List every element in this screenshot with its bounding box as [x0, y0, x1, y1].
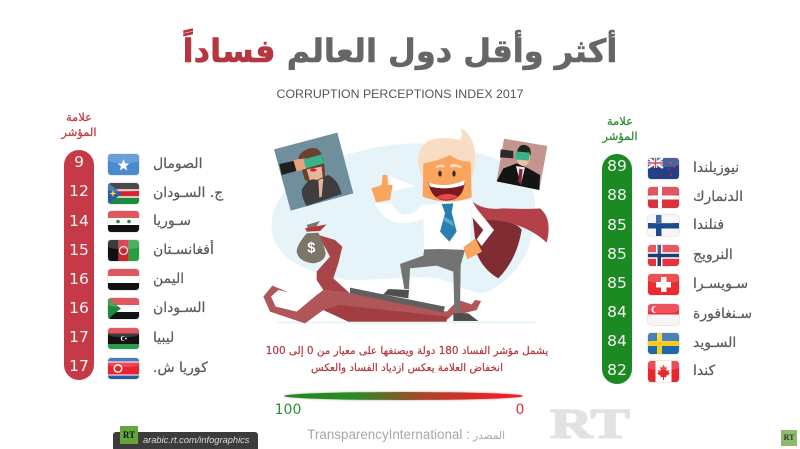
row: Afghanistan: أفغانسـتان: [153, 242, 214, 258]
heading: index score, red: علامة: [66, 110, 92, 124]
row: Somalia: [108, 154, 202, 176]
hero: trousers: [400, 248, 465, 312]
laptop slab under boot: [350, 288, 445, 312]
scale label 0: 0: [516, 402, 524, 418]
row: Denmark: [648, 186, 743, 208]
website badge: [113, 426, 258, 449]
row: Sudan: السـودان: [153, 300, 205, 316]
score pill: red: 9: [74, 153, 84, 171]
score pill: red: 12: [69, 182, 89, 200]
score pill: green: 84: [607, 332, 627, 350]
heading: index score, green: [602, 114, 638, 144]
row: Denmark: الدنمارك: [693, 189, 743, 205]
gradient scale bar: [284, 392, 523, 400]
row: Singapore: سـنغافورة: [693, 306, 752, 322]
row: Switzerland: [648, 274, 748, 296]
row: Switzerland: سـويسـرا: [693, 276, 748, 292]
row: Sweden: [648, 332, 736, 354]
row: Afghanistan: [108, 240, 214, 262]
score pill: red: 14: [69, 212, 89, 230]
money bag: [297, 221, 327, 263]
RT green logo: RT: [123, 430, 135, 440]
row: Libya: ليبيا: [153, 330, 174, 346]
score pill: red: 17: [69, 328, 89, 346]
dragon: [263, 235, 481, 323]
row: Sudan: [108, 298, 205, 320]
row: Singapore: [648, 304, 752, 326]
score pill: green: 82: [607, 361, 627, 379]
score pill: red: 16: [69, 270, 89, 288]
score pill: green: 85: [607, 274, 627, 292]
badge bar: [113, 432, 258, 449]
score pill: red: 17: [69, 357, 89, 375]
row: Finland: فنلندا: [693, 217, 724, 233]
scale label 100: 100: [275, 402, 301, 418]
row: Yemen: [108, 268, 184, 290]
description text: يشمل مؤشر الفساد 180 دولة ويصنفها على معيار من 0 إلى 100: [266, 345, 548, 357]
hero: shirt: [423, 200, 472, 249]
row: South Sudan: ج. السـودان: [153, 185, 223, 201]
description text: انخفاض العلامة يعكس ازدياد الفساد والعكس: [311, 362, 503, 374]
photo: man with money over eyes: [497, 139, 547, 190]
score pill: green: 89: [607, 157, 627, 175]
row: Norway: [648, 244, 733, 266]
row: Libya: [108, 328, 174, 350]
row: Somalia: الصومال: [153, 156, 202, 172]
row: Canada: كندا: [693, 363, 715, 379]
score pill: red: 16: [69, 299, 89, 317]
RT watermark: RT: [550, 402, 630, 448]
row: Syria: [108, 210, 191, 232]
description text: [266, 345, 548, 374]
row: New Zealand: نيوزيلندا: [693, 160, 739, 176]
score pill: green: [602, 154, 632, 384]
hero: cape: [472, 202, 549, 278]
heading: index score, red: [60, 110, 97, 140]
row: Sweden: السـويد: [693, 335, 736, 351]
money bag: $: [307, 241, 315, 257]
row: North Korea: [108, 358, 208, 380]
website url: arabic.rt.com/infographics: [143, 435, 249, 445]
hero: hand on hip: [463, 203, 494, 259]
row: Canada: [648, 360, 716, 382]
row: Syria: سـوريا: [153, 213, 191, 229]
score pill: green: 88: [607, 186, 627, 204]
background blob: [272, 143, 535, 293]
heading: index score, red: المؤشر: [61, 125, 97, 139]
source: TransparencyInternational : المصدر: [307, 427, 505, 442]
hero: tie: [440, 203, 457, 242]
row: North Korea: كوريا ش.: [153, 360, 208, 376]
heading: index score, green: علامة: [607, 114, 633, 128]
title: أكثر وأقل دول العالم فساداً: [183, 32, 617, 70]
panel: most corrupt: [60, 110, 224, 380]
ground line: [277, 321, 537, 323]
score pill: green: 85: [607, 245, 627, 263]
subtitle: CORRUPTION PERCEPTIONS INDEX 2017: [277, 87, 523, 101]
hero: arm and pointing hand: [371, 175, 423, 223]
hero: shoes: [383, 289, 478, 321]
panel: least corrupt: [602, 114, 752, 384]
score pill: red: 15: [69, 241, 89, 259]
RT corner logo: [781, 430, 797, 446]
row: Finland: [648, 214, 724, 236]
row: Norway: النرويج: [693, 247, 733, 263]
heading: index score, green: المؤشر: [602, 129, 638, 143]
row: New Zealand: [648, 158, 739, 180]
score pill: red: [64, 150, 94, 380]
illustration: corrupt businessman standing on a defeated dragon: [263, 128, 549, 324]
RT corner logo: RT: [784, 433, 794, 442]
row: South Sudan: [108, 182, 224, 204]
row: Yemen: اليمن: [153, 271, 184, 287]
hero: head: [418, 128, 475, 202]
score pill: green: 85: [607, 216, 627, 234]
score pill: green: 84: [607, 303, 627, 321]
photo: woman with money over eyes: [274, 133, 353, 211]
RT green logo: [120, 426, 138, 444]
